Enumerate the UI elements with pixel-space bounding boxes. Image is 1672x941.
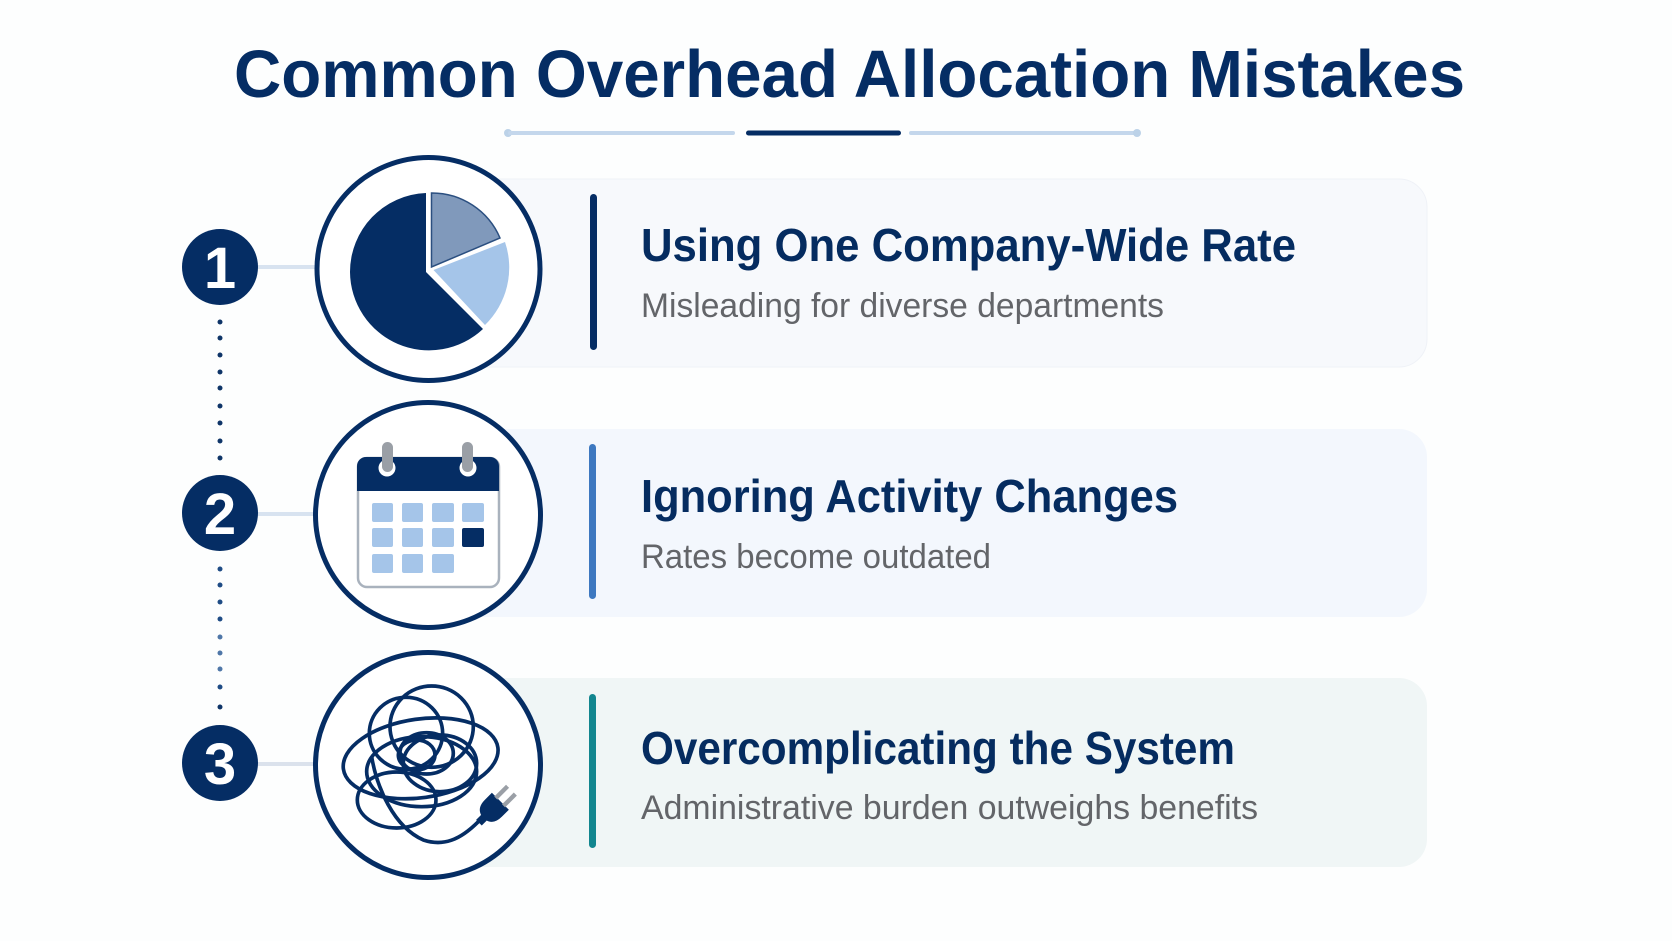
- step 3 badge: [182, 725, 317, 801]
- panel: overcomplicating the system: [440, 678, 1427, 867]
- card 2 description: Rates become outdated: [641, 538, 991, 576]
- card 1 accent bar: [590, 194, 597, 350]
- card 2 background: [440, 429, 1427, 617]
- icon: calendar: [316, 402, 540, 628]
- card 3 background: [440, 678, 1427, 867]
- step 1 badge: [182, 229, 317, 305]
- step 2 badge: [182, 475, 317, 551]
- panel: using one company-wide rate: [440, 179, 1427, 367]
- title divider: [504, 129, 1141, 137]
- timeline dots: 2 to 3: [218, 566, 222, 710]
- panel: ignoring activity changes: [440, 429, 1427, 617]
- card 1 heading: Using One Company-Wide Rate: [641, 219, 1296, 271]
- icon: pie chart: [317, 158, 540, 380]
- card 3 heading: Overcomplicating the System: [641, 722, 1235, 774]
- icon: tangled cord with plug: [316, 652, 540, 878]
- card 3 accent bar: [589, 694, 596, 848]
- timeline dots: 1 to 2: [218, 320, 222, 460]
- card 3 description: Administrative burden outweighs benefits: [641, 789, 1258, 827]
- card 1 background: [440, 179, 1427, 367]
- step 1 badge: 1: [204, 236, 236, 301]
- step 2 badge: 2: [204, 482, 236, 547]
- card 2 accent bar: [589, 444, 596, 599]
- title: Common Overhead Allocation Mistakes: [234, 37, 1465, 112]
- card 2 heading: Ignoring Activity Changes: [641, 470, 1178, 522]
- step 3 badge: 3: [204, 732, 236, 797]
- card 1 description: Misleading for diverse departments: [641, 287, 1164, 325]
